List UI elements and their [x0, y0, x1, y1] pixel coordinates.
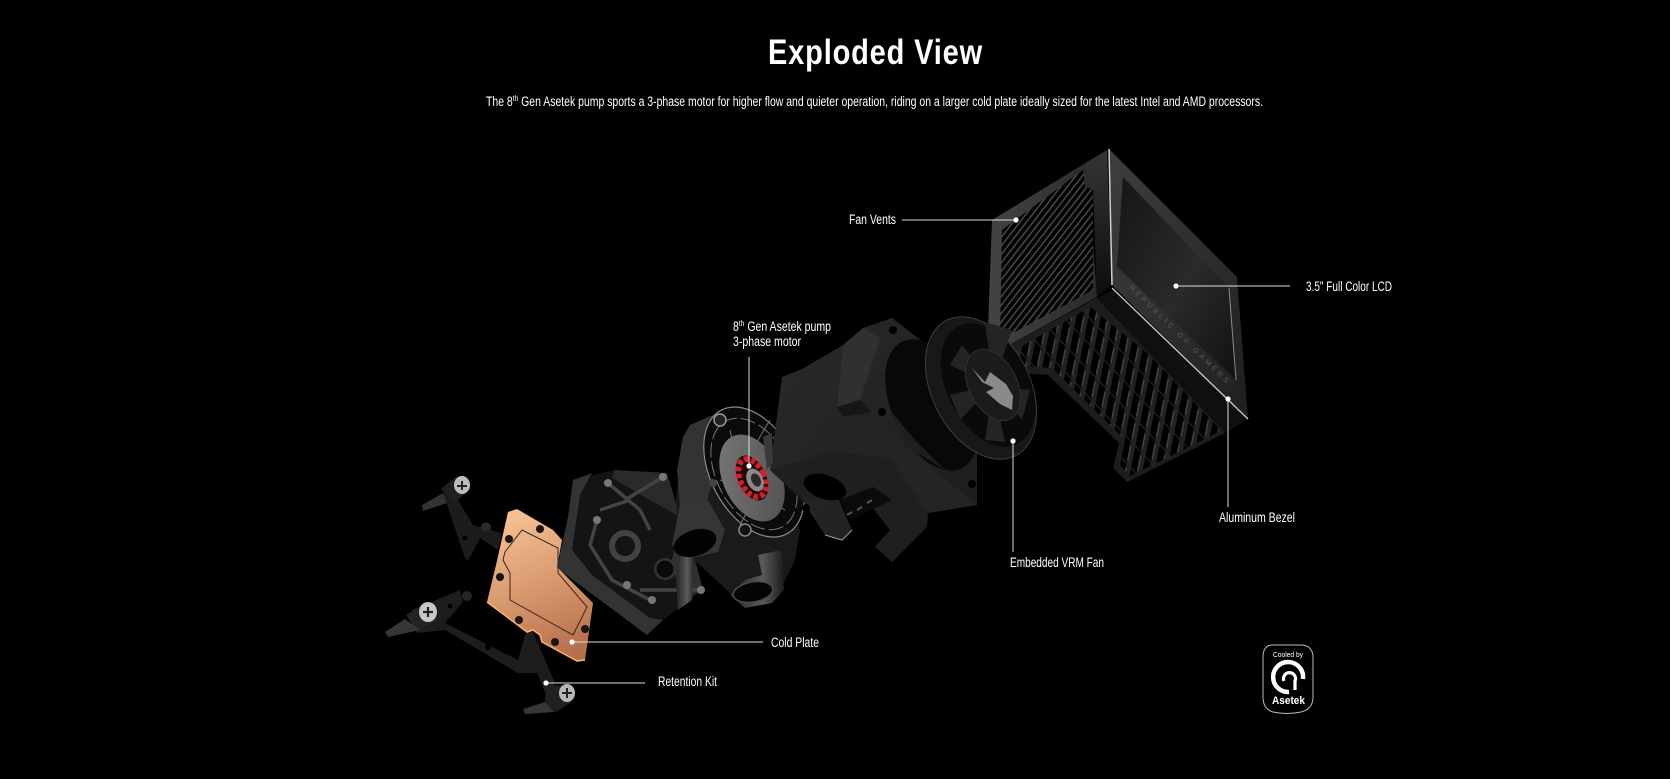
cooler lid: bezel strip — [1097, 290, 1248, 433]
coolant port cylinder — [670, 479, 725, 562]
callout: pump motor — [733, 318, 831, 469]
badge: cooled by Asetek: Asetek — [1272, 695, 1306, 707]
callout: LCD: 3.5" Full Color LCD — [1306, 279, 1392, 294]
pump body — [676, 415, 800, 600]
retention kit: upper bracket — [422, 476, 502, 561]
LCD screen — [1117, 177, 1236, 380]
cooler lid: LCD face: REPUBLIC OF GAMERS — [1128, 284, 1230, 385]
middle pump housing — [557, 470, 705, 635]
callout: retention kit: Retention Kit — [658, 674, 717, 689]
badge: cooled by Asetek: Cooled by — [1273, 652, 1303, 659]
callout: embedded VRM fan — [1010, 438, 1104, 570]
callout: pump motor: th — [739, 318, 745, 328]
callout: aluminum bezel — [1219, 396, 1295, 525]
stand-off strip with holes — [763, 433, 773, 470]
subtitle text: The 8 — [486, 94, 521, 109]
callout: aluminum bezel: Aluminum Bezel — [1219, 510, 1295, 525]
callout: pump motor: 8 — [733, 319, 741, 334]
ROG fan hub — [954, 340, 1032, 430]
VRM fan shroud — [763, 318, 998, 562]
callout: cold plate: Cold Plate — [771, 635, 819, 650]
retention kit: lower bracket — [385, 590, 575, 714]
subtitle text: Gen Asetek pump sports a 3-phase motor for higher flow and quieter operation, riding on a larger cold plate ideally sized for the latest Intel and AMD processors. — [518, 94, 1263, 109]
cooler lid: underside vents — [987, 298, 1225, 482]
exploded product illustration — [385, 149, 1248, 714]
callout: cold plate — [569, 635, 819, 650]
arch cutout — [800, 469, 850, 505]
cold plate — [487, 509, 593, 661]
callout: pump motor: Gen Asetek pump — [744, 319, 831, 334]
callout: embedded VRM fan: Embedded VRM Fan — [1010, 555, 1104, 570]
callout: fan vents: Fan Vents — [849, 212, 896, 227]
callout: pump motor: 3-phase motor — [733, 334, 801, 349]
badge: cooled by Asetek — [1263, 645, 1313, 714]
coolant hose stub — [730, 550, 784, 608]
cooler lid: vented side — [987, 150, 1112, 360]
pump with 3-phase motor — [670, 390, 825, 610]
callout: LCD — [1173, 279, 1392, 294]
subtitle text: th — [513, 93, 518, 103]
cooler lid: LCD face — [1109, 149, 1248, 419]
title: Exploded View — [768, 33, 983, 72]
callout: retention kit — [543, 674, 717, 689]
callout: fan vents — [849, 212, 1019, 227]
embedded VRM fan — [903, 298, 1059, 478]
